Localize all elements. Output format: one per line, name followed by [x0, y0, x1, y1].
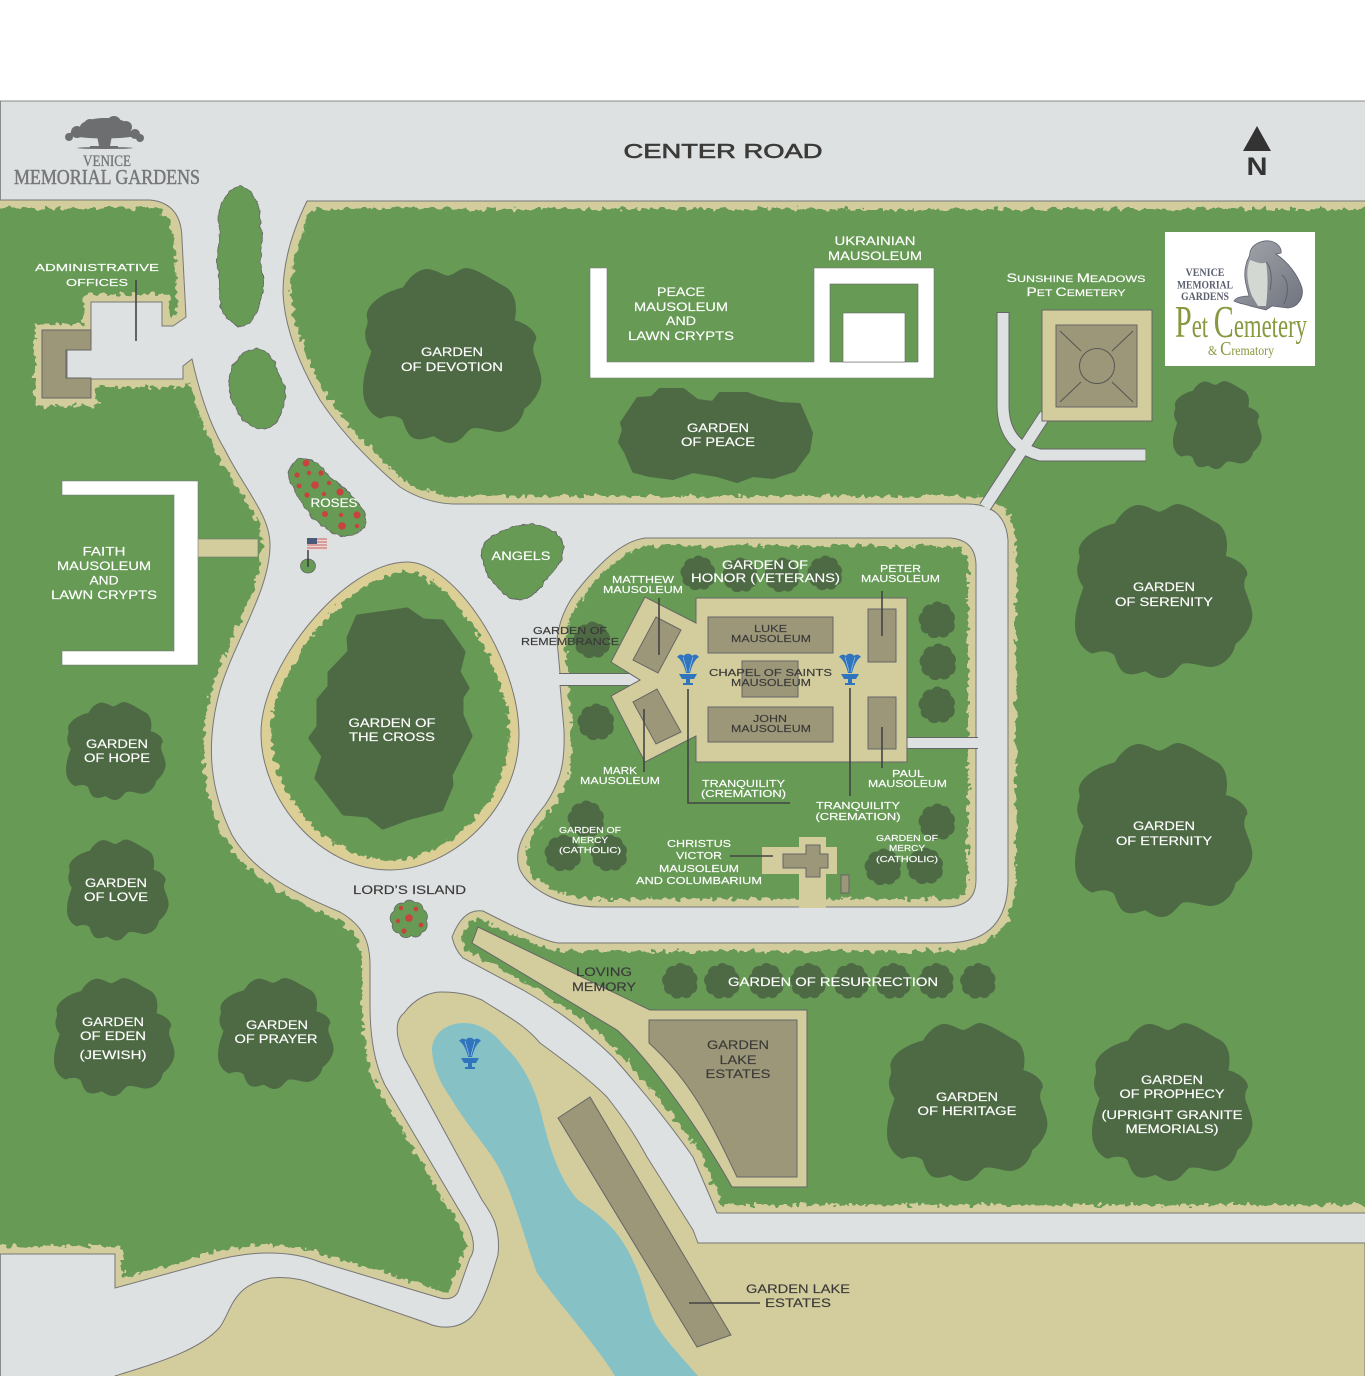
label: sunshine meadows pet cemetery: S UNSHINE M EADOWS: [1006, 271, 1146, 285]
label: tranquility west: [701, 779, 786, 800]
label: garden of prayer: [234, 1020, 318, 1046]
label: garden of love: [84, 878, 148, 904]
label: faith mausoleum: LAWN CRYPTS: [51, 590, 157, 602]
pet cemetery plot: [1042, 310, 1152, 421]
label: garden lake estates crypt: ESTATES: [765, 1298, 831, 1310]
label: garden of prayer: OF PRAYER: [234, 1034, 318, 1046]
logo: pet cemetery: GARDENS: [1181, 291, 1229, 303]
label: christus victor: AND COLUMBARIUM: [636, 876, 762, 887]
label: peter mausoleum: PETER: [880, 564, 921, 575]
icon: north arrow: [1243, 126, 1271, 181]
label: garden of love: OF LOVE: [84, 892, 148, 904]
leader lines: [136, 280, 882, 1303]
label: garden lake estates crypt: GARDEN LAKE: [746, 1284, 850, 1296]
trees: large gardens: [54, 268, 1262, 1181]
logo: venice memorial gardens: [14, 116, 200, 189]
label: john mausoleum: JOHN: [753, 714, 787, 725]
label: tranquility east: TRANQUILITY: [816, 801, 900, 812]
label: garden of prophecy: GARDEN: [1141, 1075, 1203, 1087]
label: garden of prophecy: [1102, 1075, 1243, 1136]
label: garden of eternity: GARDEN: [1133, 821, 1195, 833]
icon: flag: [300, 538, 327, 573]
label: peace mausoleum: AND: [666, 316, 696, 328]
label: garden of devotion: GARDEN: [421, 347, 483, 359]
angels island: [481, 524, 563, 600]
label: garden of eden: (JEWISH): [80, 1050, 147, 1062]
icon: oak tree: [65, 116, 144, 149]
label: ukrainian mausoleum: MAUSOLEUM: [828, 251, 922, 263]
label: garden of heritage: [918, 1092, 1017, 1118]
peace and ukrainian mausoleum: [590, 268, 934, 378]
label: peace mausoleum: [628, 287, 734, 343]
label: garden of prophecy: OF PROPHECY: [1120, 1089, 1225, 1101]
label: faith mausoleum: [51, 546, 157, 602]
label: faith mausoleum: MAUSOLEUM: [57, 561, 151, 573]
label: garden of honor: HONOR (VETERANS): [691, 573, 840, 585]
label: garden of eternity: [1116, 821, 1212, 848]
label: garden of heritage: GARDEN: [936, 1092, 998, 1104]
label: garden of remembrance: REMEMBRANCE: [521, 637, 619, 648]
label: garden of mercy east: MERCY: [889, 843, 925, 853]
label: administrative offices: ADMINISTRATIVE: [35, 263, 159, 274]
label: garden of the cross: [348, 718, 436, 744]
label: garden of eden: [80, 1017, 147, 1062]
label: peace mausoleum: LAWN CRYPTS: [628, 331, 734, 343]
label: mark mausoleum: [580, 766, 660, 787]
icon: north arrow: N: [1246, 153, 1268, 181]
label: garden of mercy east: GARDEN OF: [876, 833, 938, 843]
label: faith mausoleum: AND: [90, 576, 118, 588]
label: paul mausoleum: MAUSOLEUM: [868, 779, 947, 790]
label: garden of honor: GARDEN OF: [722, 560, 808, 572]
label: john mausoleum: [731, 714, 811, 735]
label: lord's island: LORD’S ISLAND: [353, 885, 466, 897]
label: garden lake estates plot: [706, 1040, 771, 1081]
label: chapel of saints: CHAPEL OF SAINTS: [709, 668, 832, 679]
panel: east lawn: [283, 201, 1366, 1213]
label: tranquility west: TRANQUILITY: [702, 779, 785, 790]
trees: small shrubs: [545, 556, 995, 999]
label: tranquility east: (CREMATION): [816, 812, 900, 823]
label: tranquility west: (CREMATION): [701, 789, 786, 800]
label: administrative offices: OFFICES: [66, 278, 128, 289]
label: garden of serenity: GARDEN: [1133, 582, 1195, 594]
label: mark mausoleum: MARK: [603, 766, 637, 777]
logo: pet cemetery: VENICE: [1186, 267, 1225, 279]
label: garden of prophecy: MEMORIALS): [1126, 1124, 1219, 1136]
label: matthew mausoleum: MAUSOLEUM: [603, 585, 683, 596]
label: garden lake estates plot: GARDEN: [707, 1040, 769, 1052]
label: garden of mercy east: (CATHOLIC): [876, 854, 938, 864]
panel: west lawn: [0, 200, 473, 1299]
label: garden of prayer: GARDEN: [246, 1020, 308, 1032]
label: garden lake estates crypt: [746, 1284, 850, 1310]
logo: venice memorial gardens: VENICE: [83, 153, 131, 170]
label: garden of hope: OF HOPE: [84, 753, 150, 765]
label: garden of remembrance: [521, 626, 619, 648]
icon: lake fountain: [459, 1038, 481, 1069]
rose garden island: [289, 458, 366, 536]
white header band: [0, 0, 1366, 101]
label: garden of serenity: OF SERENITY: [1115, 597, 1213, 609]
label: luke mausoleum: LUKE: [754, 624, 787, 635]
panel: central mausoleum island: [518, 538, 976, 907]
label: christus victor: MAUSOLEUM: [659, 864, 739, 875]
christus victor plot: [762, 837, 849, 908]
pet cemetery paths: [985, 312, 1146, 507]
label: christus victor: VICTOR: [676, 851, 722, 862]
sand ground around lake: [115, 992, 1365, 1376]
label: garden of peace: OF PEACE: [681, 437, 755, 449]
label: garden of hope: [84, 739, 150, 765]
label: paul mausoleum: [868, 769, 947, 790]
admin building: [42, 330, 91, 398]
logo: pet cemetery: MEMORIAL: [1177, 280, 1233, 292]
label: chapel of saints: [709, 668, 832, 689]
label: peter mausoleum: MAUSOLEUM: [861, 574, 940, 585]
label: matthew mausoleum: MATTHEW: [612, 575, 675, 586]
label: ukrainian mausoleum: UKRAINIAN: [834, 236, 916, 248]
road islands: [217, 186, 285, 429]
label: christus victor: [636, 839, 762, 887]
label: garden of hope: GARDEN: [86, 739, 148, 751]
label: loving memory: LOVING: [576, 967, 632, 979]
label: garden lake estates plot: LAKE: [720, 1055, 757, 1067]
label: garden of peace: GARDEN: [687, 423, 749, 435]
label: garden of love: GARDEN: [85, 878, 147, 890]
label: garden of devotion: OF DEVOTION: [401, 362, 503, 374]
panel: garden of the cross island: [261, 562, 519, 870]
label: garden of mercy east: [876, 833, 938, 864]
label: christus victor: CHRISTUS: [667, 839, 731, 850]
label: sunshine meadows pet cemetery: PET C EMETERY: [1026, 285, 1126, 299]
mausoleum buildings: [633, 609, 896, 749]
label: peace mausoleum: PEACE: [657, 287, 705, 299]
logo: venice memorial gardens: MEMORIAL GARDENS: [14, 165, 200, 189]
label: garden of remembrance: GARDEN OF: [533, 626, 607, 637]
right margin strip: [1365, 101, 1366, 1376]
icon: dog: [1234, 241, 1302, 310]
label: garden of serenity: [1115, 582, 1213, 609]
faith mausoleum and lawn crypts: [62, 481, 258, 665]
lake: [432, 1023, 698, 1376]
label: administrative offices: [35, 263, 159, 289]
label: paul mausoleum: PAUL: [892, 769, 925, 780]
label: loving memory: MEMORY: [572, 982, 636, 994]
label: peter mausoleum: [861, 564, 940, 585]
central plaza: [611, 597, 907, 762]
label: luke mausoleum: [731, 624, 811, 645]
label: garden of prophecy: (UPRIGHT GRANITE: [1102, 1110, 1243, 1122]
loving memory and garden lake estates plot: [472, 927, 807, 1187]
label: matthew mausoleum: [603, 575, 683, 596]
label: garden of eternity: OF ETERNITY: [1116, 836, 1212, 848]
label: garden of devotion: [401, 347, 503, 374]
label: mark mausoleum: MAUSOLEUM: [580, 776, 660, 787]
label: angels: ANGELS: [492, 551, 551, 563]
label: garden of eden: OF EDEN: [80, 1031, 146, 1043]
label: ukrainian mausoleum: [828, 236, 922, 263]
label: garden of peace: [681, 423, 755, 449]
label: john mausoleum: MAUSOLEUM: [731, 724, 811, 735]
label: garden of mercy west: GARDEN OF: [559, 825, 621, 835]
label: garden of mercy west: (CATHOLIC): [559, 845, 621, 855]
label: peace mausoleum: MAUSOLEUM: [634, 302, 728, 314]
icon: plaza fountains: [677, 654, 861, 685]
label: sunshine meadows pet cemetery: [1006, 271, 1146, 299]
logo: pet cemetery: [1165, 232, 1315, 366]
building: garden lake estates long crypt: [558, 1097, 731, 1347]
label: garden of mercy west: [559, 825, 621, 855]
label: garden of eden: GARDEN: [82, 1017, 144, 1029]
label: tranquility east: [816, 801, 900, 823]
lord's island: [390, 900, 427, 938]
label: chapel of saints: MAUSOLEUM: [731, 678, 811, 689]
label: garden of the cross: GARDEN OF: [348, 718, 436, 730]
label: garden of resurrection: GARDEN OF RESURRECTION: [728, 977, 938, 989]
label: garden of heritage: OF HERITAGE: [918, 1106, 1017, 1118]
label: garden lake estates plot: ESTATES: [706, 1069, 771, 1081]
heading: center road: CENTER ROAD: [624, 141, 822, 163]
logo: pet cemetery: Pet Cemetery: [1175, 297, 1307, 347]
label: loving memory: [572, 967, 636, 994]
plaza road cuts: [550, 674, 982, 748]
label: luke mausoleum: MAUSOLEUM: [731, 634, 811, 645]
logo: pet cemetery: & Crematory: [1208, 338, 1274, 360]
label: roses: ROSES: [310, 498, 358, 510]
label: faith mausoleum: FAITH: [82, 546, 126, 558]
label: garden of honor: [691, 560, 840, 585]
label: garden of the cross: THE CROSS: [349, 732, 435, 744]
label: garden of mercy west: MERCY: [572, 835, 608, 845]
